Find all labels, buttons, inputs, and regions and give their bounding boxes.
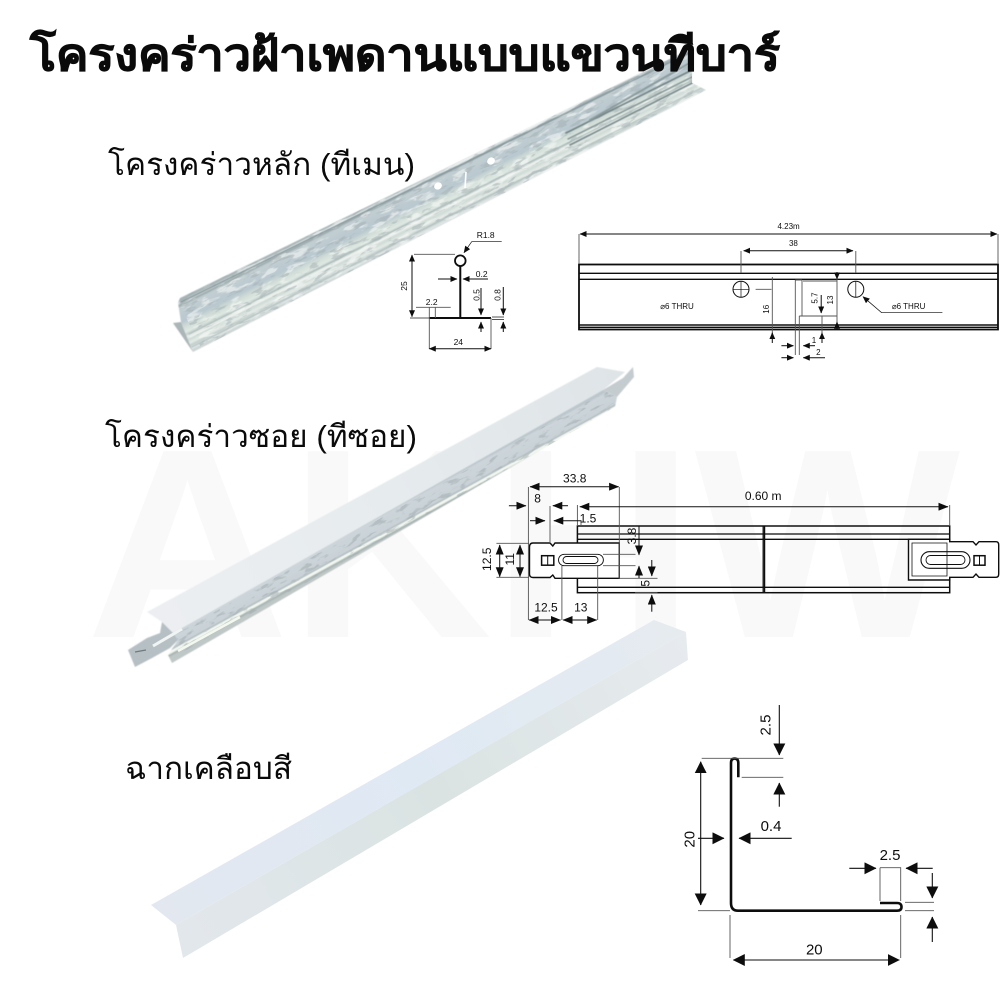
front face <box>176 632 688 958</box>
diagram: cross T-bar elevation <box>480 471 999 620</box>
diagram: main T-bar cross section <box>399 230 504 349</box>
diagram: main T-bar cross section: 0.2 <box>476 269 488 279</box>
diagram: angle trim cross section: 0.4 <box>761 818 781 835</box>
diagram: cross T-bar elevation: 13 <box>574 601 588 615</box>
diagram: angle trim cross section: 2.5 <box>758 715 774 735</box>
diagram: cross T-bar elevation: 8 <box>534 491 541 505</box>
title: โครงคร่าวฝ้าเพดานแบบแขวนทีบาร์ <box>29 28 780 80</box>
diagram: main T-bar elevation: 13 <box>826 295 835 304</box>
right tab <box>908 539 999 580</box>
diagram: main T-bar elevation: 1 <box>812 336 817 345</box>
diagram: main T-bar elevation: 16 <box>762 304 771 314</box>
diagram: main T-bar elevation: 4.23m <box>777 222 800 231</box>
diagram: main T-bar elevation: 38 <box>789 239 798 248</box>
diagram: main T-bar cross section: 24 <box>454 337 463 347</box>
watermark: AKHW <box>86 394 963 695</box>
diagram: cross T-bar elevation: 0.60 m <box>745 489 782 503</box>
heading: angle trim: ฉากเคลือบสี <box>125 751 292 786</box>
right tab <box>603 367 634 397</box>
diagram: main T-bar cross section: 25 <box>399 281 409 291</box>
diagram: cross T-bar elevation: 12.5 <box>480 547 494 571</box>
diagram: main T-bar elevation: 5.7 <box>811 292 820 304</box>
diagram: main T-bar cross section: R1.8 <box>477 230 495 240</box>
white flange <box>147 367 625 633</box>
diagram: cross T-bar elevation: 12.5 <box>534 601 558 615</box>
product photo: main T-bar <box>172 50 706 352</box>
diagram: main T-bar elevation: ⌀6 THRU <box>660 302 694 311</box>
product photo: cross T-bar <box>128 367 636 667</box>
heading: main T-bar: โครงคร่าวหลัก (ทีเมน) <box>108 147 415 182</box>
web <box>168 390 617 663</box>
heading: cross T-bar: โครงคร่าวซอย (ทีซอย) <box>105 419 417 454</box>
top face <box>151 620 686 925</box>
diagram: main T-bar elevation: ⌀6 THRU <box>892 302 926 311</box>
diagram: main T-bar cross section: 0.8 <box>493 289 503 301</box>
product photo: painted angle trim <box>151 620 688 958</box>
diagram: cross T-bar elevation: 5 <box>639 580 653 587</box>
diagram: angle trim cross section <box>682 705 934 960</box>
diagram: cross T-bar elevation: 11 <box>503 553 517 566</box>
diagram: cross T-bar elevation: 33.8 <box>563 471 587 485</box>
diagram: angle trim cross section: 20 <box>682 831 698 848</box>
diagram: cross T-bar elevation: 1.5 <box>580 511 597 525</box>
slots in web <box>433 181 443 191</box>
diagram: angle trim cross section: 2.5 <box>880 847 900 864</box>
diagram: main T-bar elevation: 2 <box>816 348 821 357</box>
diagram: main T-bar elevation <box>579 222 998 358</box>
diagram: main T-bar cross section: 2.2 <box>426 297 438 307</box>
diagram: main T-bar cross section: 0.5 <box>472 289 482 301</box>
left tab <box>128 622 180 667</box>
left tab <box>530 543 619 578</box>
diagram: cross T-bar elevation: 3.8 <box>625 527 639 544</box>
diagram: angle trim cross section: 20 <box>806 942 823 958</box>
